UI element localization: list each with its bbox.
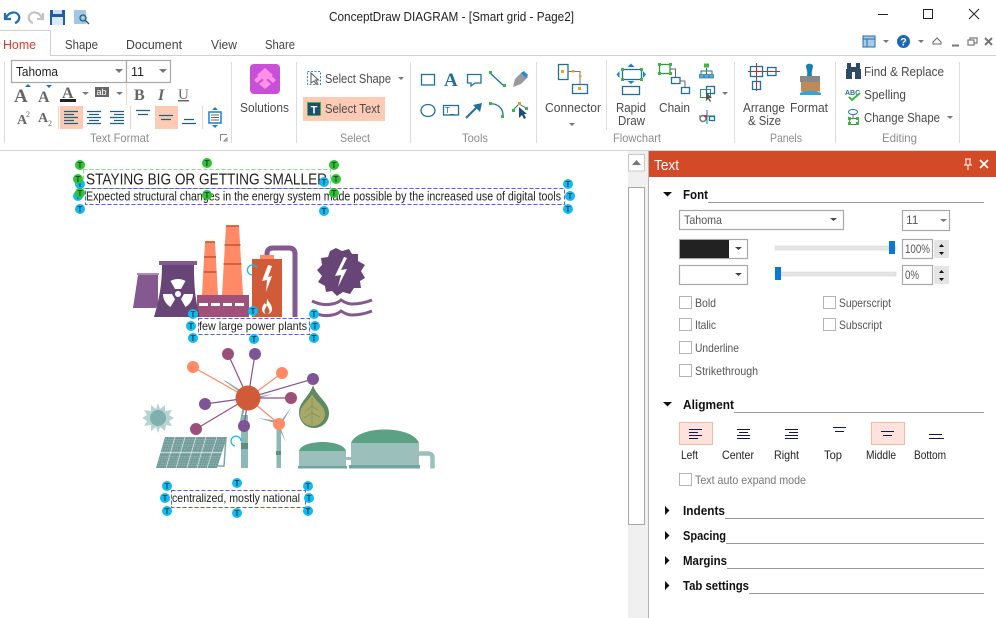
panel: editing: Spelling [864,88,906,102]
font style buttons: 2 [26,110,30,119]
diagram title selection frame [84,170,330,188]
section: font: Font [683,188,709,202]
section: alignment [663,398,984,487]
font option checkboxes: Strikethrough [695,364,758,378]
icon: tree [700,64,714,78]
network spokes [193,354,313,429]
panel: flowchart [613,63,728,145]
icon: chain [658,63,690,94]
tab bar: Shape [65,38,98,52]
icon: help: ? [900,36,907,48]
icon: change shape [848,110,859,125]
panel: editing: Change Shape [864,111,940,125]
panel: select: Select [340,131,371,145]
font style buttons [14,84,189,128]
section: spacing [665,529,984,544]
panel: panels: Format [790,101,828,115]
solar panel [156,437,227,468]
panel: tools [421,70,528,145]
biogas digesters [298,430,432,468]
panel header [649,151,996,177]
icon: binoculars [846,63,861,79]
icon: rapid draw [616,64,646,94]
network nodes [187,348,319,435]
section: indents [665,504,984,518]
alignment button highlights [680,422,904,444]
text colour select [680,240,748,258]
icon: sun [142,403,174,433]
panel: panels: Arrange [743,101,785,115]
alignment labels: Top [824,448,842,462]
network hub [236,386,260,410]
diagram subtitle selection frame [86,188,564,204]
section: tab settings: Tab settings [683,579,749,593]
select text button: Select Text [325,102,380,116]
alignment buttons [60,106,221,129]
panel header: Text [654,157,680,174]
tab bar: Share [265,38,295,52]
ribbon dividers [4,60,960,143]
opacity value [902,240,949,258]
panel: flowchart: Chain [659,101,690,115]
alignment labels: Right [774,448,800,462]
connector button: Connector [545,101,601,115]
font style buttons: A [14,86,28,107]
tab bar: View [211,38,238,52]
window title: ConceptDraw DIAGRAM - [Smart grid - Page2] [329,9,574,24]
panel: flowchart: Flowchart [613,131,662,145]
icon: spelling: ABC [845,90,860,97]
alignment labels: Bottom [914,448,946,462]
rotation handle: power plants [247,265,257,275]
ribbon bottom border [0,150,996,152]
background opacity value [902,266,949,284]
alignment labels: Left [681,448,699,462]
opacity value: 100% [905,242,930,256]
panel: flowchart: Rapid [616,101,646,115]
section: tab settings [665,579,984,594]
tab bar: Document [126,38,183,52]
background colour select [680,266,748,284]
label frame: few large power plants [198,318,310,334]
panel: text format [12,60,227,145]
label: few large power plants: few large power plants [199,319,307,333]
subheading: Expected structural changes in the energy system made possible by the increased use of digital tools [86,190,561,204]
select text button [303,97,385,121]
font family select: Tahoma [684,213,722,227]
icon: save [50,10,65,25]
panel: text properties [649,151,996,594]
size combobox: 11 [131,65,144,79]
vertical scrollbar [628,151,648,618]
section: font [663,188,984,378]
wind turbines [223,380,292,468]
selection handles: power plants label: TTTTTTTT [188,307,318,344]
panel: tools: A [444,70,458,91]
font style buttons: B [134,87,145,104]
heading: staying big or getting smaller: STAYING BIG OR GETTING SMALLER [86,172,327,188]
tab bar [0,30,996,56]
font family select [680,210,844,230]
panel: editing: Editing [882,131,917,145]
alignment labels: Center [722,448,754,462]
selection handles: subtitle: TTTTTTTT [76,178,572,216]
font style buttons: 2 [48,119,52,128]
font option checkboxes [680,296,892,378]
panel: tools: Tools [462,131,488,145]
panel: panels [743,63,828,145]
background opacity value: 0% [905,268,919,282]
icon: redo [29,12,43,23]
font option checkboxes: Italic [695,318,716,332]
illustration: centralized renewable network [142,348,432,468]
font style buttons: A [17,113,28,128]
font size select: 11 [906,213,919,227]
text auto expand checkbox: Text auto expand mode [695,473,806,487]
hydro gear [317,248,365,296]
alignment labels: Middle [866,448,896,462]
water waves [312,300,372,316]
factory building [197,295,249,317]
font style buttons: U [178,87,189,103]
label frame: centralized, mostly national [172,490,306,508]
alignment glyphs [689,428,944,438]
panel: text format: Text Format [90,131,150,145]
quick access toolbar [5,10,89,25]
secondary window controls [863,35,992,48]
icon: align [699,110,715,124]
panel: editing: Find & Replace [864,65,944,79]
opacity slider [775,241,896,254]
font combobox: Tahoma [16,65,58,79]
font style buttons: I [157,87,165,104]
panel: panels: Panels [770,131,802,145]
connector button [545,64,601,126]
small cooling tower [133,273,159,308]
font style buttons: A [62,85,74,102]
select text button: T [311,104,318,116]
panel: select [303,72,404,145]
selection handles: title: TTTTTTTT [76,159,338,200]
illustration: large power plants [133,226,372,317]
font option checkboxes: Bold [695,296,716,310]
section: margins: Margins [683,554,727,568]
icon: leaf [299,385,329,428]
section: spacing: Spacing [683,529,726,543]
section: alignment: Aligment [683,398,735,412]
icon: solutions [250,64,280,94]
rotation handle: network [231,436,241,446]
icon: format brush [800,64,821,95]
battery [252,248,295,317]
font style buttons: A [38,89,50,106]
font option checkboxes: Subscript [839,318,883,332]
nuclear cooling tower [154,261,200,317]
panel: panels: & Size [748,114,781,128]
font style buttons: ab [96,87,107,97]
chimneys [202,226,243,295]
tab bar: Home [3,38,36,52]
panel: editing [845,63,953,145]
icon: select group [700,86,728,102]
alignment labels [681,448,946,462]
size combobox [126,60,170,82]
font style buttons: A [38,111,49,126]
panel: flowchart: Draw [618,114,646,128]
section: margins [665,554,984,568]
panel: tools: T_ [445,106,455,115]
icon: print preview [74,10,89,24]
section: indents: Indents [683,504,725,518]
font option checkboxes: Underline [695,341,739,355]
background opacity slider [775,267,896,280]
font combobox [12,60,126,82]
select shape button: Select Shape [325,72,391,86]
font size select [902,210,950,230]
icon: layout [863,36,875,47]
icon: undo [5,12,19,23]
icon: arrange [748,63,780,91]
selection handles: network label: TTTTTTTT [162,479,312,518]
label: centralized, mostly national: centralized, mostly national [172,491,300,505]
solutions label: Solutions [240,101,289,115]
font option checkboxes: Superscript [839,296,892,310]
window controls [878,9,979,19]
